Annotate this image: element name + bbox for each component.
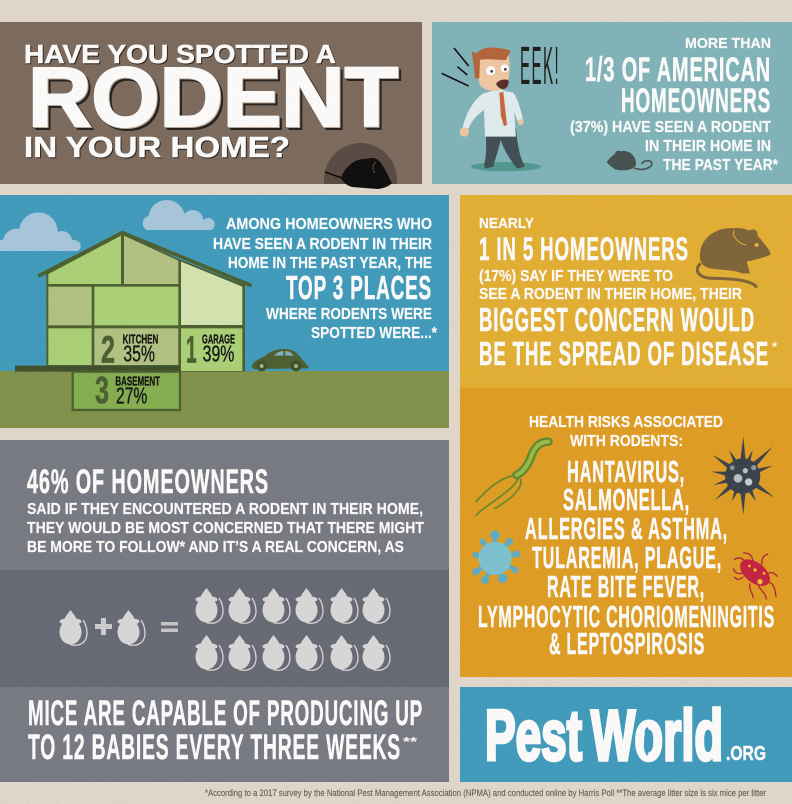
icon: blue virus bbox=[472, 530, 520, 584]
text: 37 percent: (37%) HAVE SEEN A RODENT bbox=[570, 119, 771, 136]
text: with rodents: WITH RODENTS: bbox=[570, 433, 683, 450]
label: basement 27%: 27% bbox=[116, 382, 147, 408]
panel: pestworld logo bbox=[460, 687, 792, 782]
logo: pest: Pest bbox=[485, 697, 582, 776]
text: spotted were: SPOTTED WERE...* bbox=[311, 325, 438, 342]
text: double asterisk: ** bbox=[403, 734, 418, 749]
logo: dot org: .ORG bbox=[726, 743, 766, 765]
text: 46% of homeowners: 46% OF HOMEOWNERS bbox=[27, 463, 269, 501]
text: asterisk: * bbox=[772, 339, 778, 354]
heading: rodent: RODENT bbox=[28, 50, 398, 144]
panel: one third of homeowners bbox=[432, 22, 792, 184]
list: health risks bbox=[478, 454, 775, 661]
text: mice are capable: MICE ARE CAPABLE OF PRODUCING UP bbox=[28, 694, 423, 733]
text: nearly: NEARLY bbox=[479, 215, 534, 232]
icon: dark virus bbox=[712, 437, 774, 515]
panel: title bbox=[0, 22, 422, 189]
icon: green bacteria bbox=[476, 442, 548, 515]
illustration: clouds, house and car bbox=[0, 200, 308, 411]
text: more than: MORE THAN bbox=[685, 35, 771, 52]
text: in their home in: IN THEIR HOME IN bbox=[645, 138, 771, 155]
heading: in your home: IN YOUR HOME? bbox=[24, 132, 290, 164]
list: health risks: HANTAVIRUS, bbox=[567, 454, 685, 489]
label: kitchen 35%: 2 bbox=[101, 328, 115, 370]
icon: brown mouse bbox=[697, 228, 771, 288]
label: kitchen 35%: KITCHEN bbox=[123, 331, 158, 346]
text: they would be most concerned: THEY WOULD BE MOST CONCERNED THAT THERE MIGHT bbox=[27, 520, 424, 537]
label: kitchen 35% bbox=[101, 328, 158, 370]
text: have seen a rodent: HAVE SEEN A RODENT IN THEIR bbox=[213, 236, 432, 253]
label: garage 39%: 1 bbox=[186, 328, 197, 370]
heading: have you spotted a: HAVE YOU SPOTTED A bbox=[24, 41, 336, 69]
label: basement 27% bbox=[95, 369, 160, 411]
text: see a rodent: SEE A RODENT IN THEIR HOME, THEIR bbox=[479, 286, 742, 303]
text: 17 percent: (17%) SAY IF THEY WERE TO bbox=[479, 268, 673, 285]
text: where rodents were: WHERE RODENTS WERE bbox=[266, 306, 432, 323]
icon: mouse hole bbox=[324, 143, 397, 189]
label: garage 39%: 39% bbox=[203, 341, 234, 367]
diagram: mice reproduction equation bbox=[60, 588, 390, 670]
panel: 46 percent of homeowners bbox=[0, 440, 449, 782]
text: health risks associated: HEALTH RISKS ASSOCIATED bbox=[529, 414, 723, 431]
icon: insect in logo bbox=[644, 727, 650, 756]
text: be more to follow: BE MORE TO FOLLOW* AND IT’S A REAL CONCERN, AS bbox=[27, 539, 404, 556]
label: kitchen 35%: 35% bbox=[123, 341, 155, 367]
icon: red microbe bbox=[733, 553, 777, 599]
panel: top 3 places bbox=[0, 195, 449, 428]
logo: world: World bbox=[591, 697, 723, 776]
text: said if they encountered: SAID IF THEY ENCOUNTERED A RODENT IN THEIR HOME, bbox=[27, 501, 423, 518]
panel: spread of disease bbox=[460, 195, 792, 388]
panel: health risks bbox=[460, 388, 792, 677]
text: the past year: THE PAST YEAR* bbox=[663, 157, 779, 174]
label: garage 39% bbox=[186, 328, 235, 370]
label: basement 27%: 3 bbox=[95, 369, 109, 411]
text: eek: EEK! bbox=[520, 36, 560, 96]
icon: small rat bbox=[607, 151, 652, 170]
icon: scared man bbox=[442, 47, 541, 171]
label: basement 27%: BASEMENT bbox=[115, 374, 160, 389]
band: mouse equation background bbox=[0, 570, 449, 687]
label: garage 39%: GARAGE bbox=[202, 331, 235, 346]
text: top 3 places: TOP 3 PLACES bbox=[286, 269, 432, 306]
text: home in the past year: HOME IN THE PAST YEAR, THE bbox=[228, 255, 432, 272]
ground bbox=[0, 371, 449, 428]
text: 12 babies: TO 12 BABIES EVERY THREE WEEKS bbox=[28, 728, 401, 767]
text: among homeowners: AMONG HOMEOWNERS WHO bbox=[226, 216, 432, 233]
